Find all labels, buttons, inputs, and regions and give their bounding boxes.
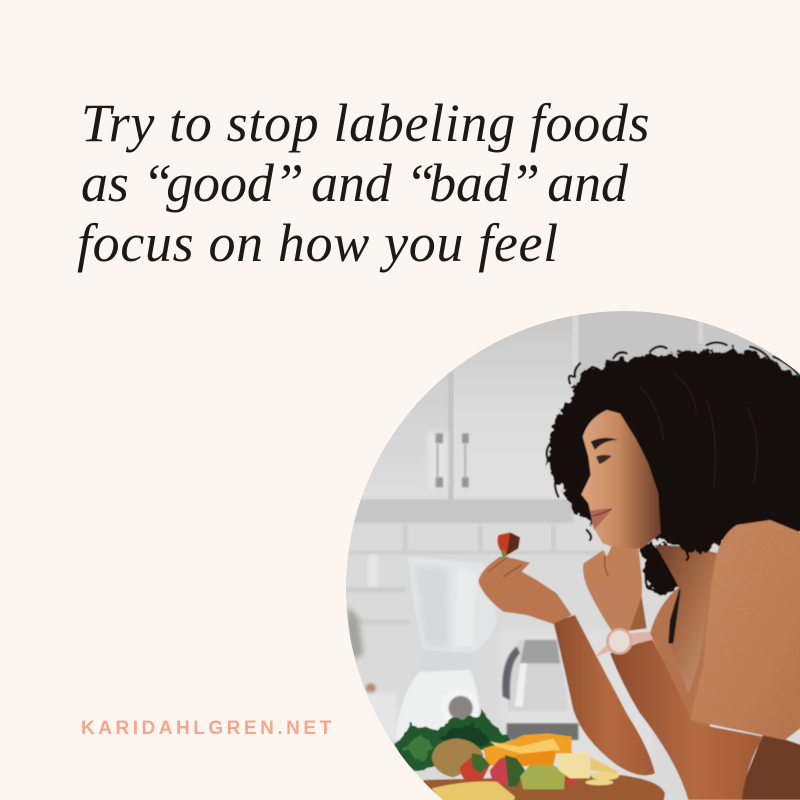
title: focus on how you feel <box>77 213 559 273</box>
kiwi slices <box>520 765 565 789</box>
watch <box>595 628 652 657</box>
photo: woman eating fruit in a circle crop <box>346 311 800 800</box>
hair mass <box>547 342 800 591</box>
strawberry <box>497 532 520 557</box>
holding hand <box>478 557 572 624</box>
title: Try to stop labeling foods <box>81 93 650 153</box>
banana <box>432 781 515 800</box>
strawberries on board <box>460 753 577 787</box>
shirt sleeve <box>690 520 800 740</box>
kettle <box>502 640 578 740</box>
shirt lower torso <box>737 733 800 800</box>
far arm and elbow <box>553 615 655 775</box>
banana slices <box>558 752 619 785</box>
greens <box>395 708 512 770</box>
inner strap <box>668 588 681 643</box>
near arm <box>610 638 763 800</box>
wooden board <box>423 775 665 800</box>
chin hand <box>583 546 647 633</box>
face <box>581 410 661 549</box>
kiwi <box>432 738 483 777</box>
hair lower curls <box>638 545 680 597</box>
kitchen background <box>337 297 800 800</box>
brand website: KARIDAHLGREN.NET <box>81 718 335 739</box>
shirt base behind chest <box>650 553 717 727</box>
neck and chest <box>655 545 718 693</box>
orange slices <box>483 733 572 767</box>
title <box>77 93 650 273</box>
blender <box>395 557 496 740</box>
title: as “good” and “bad” and <box>81 153 628 213</box>
